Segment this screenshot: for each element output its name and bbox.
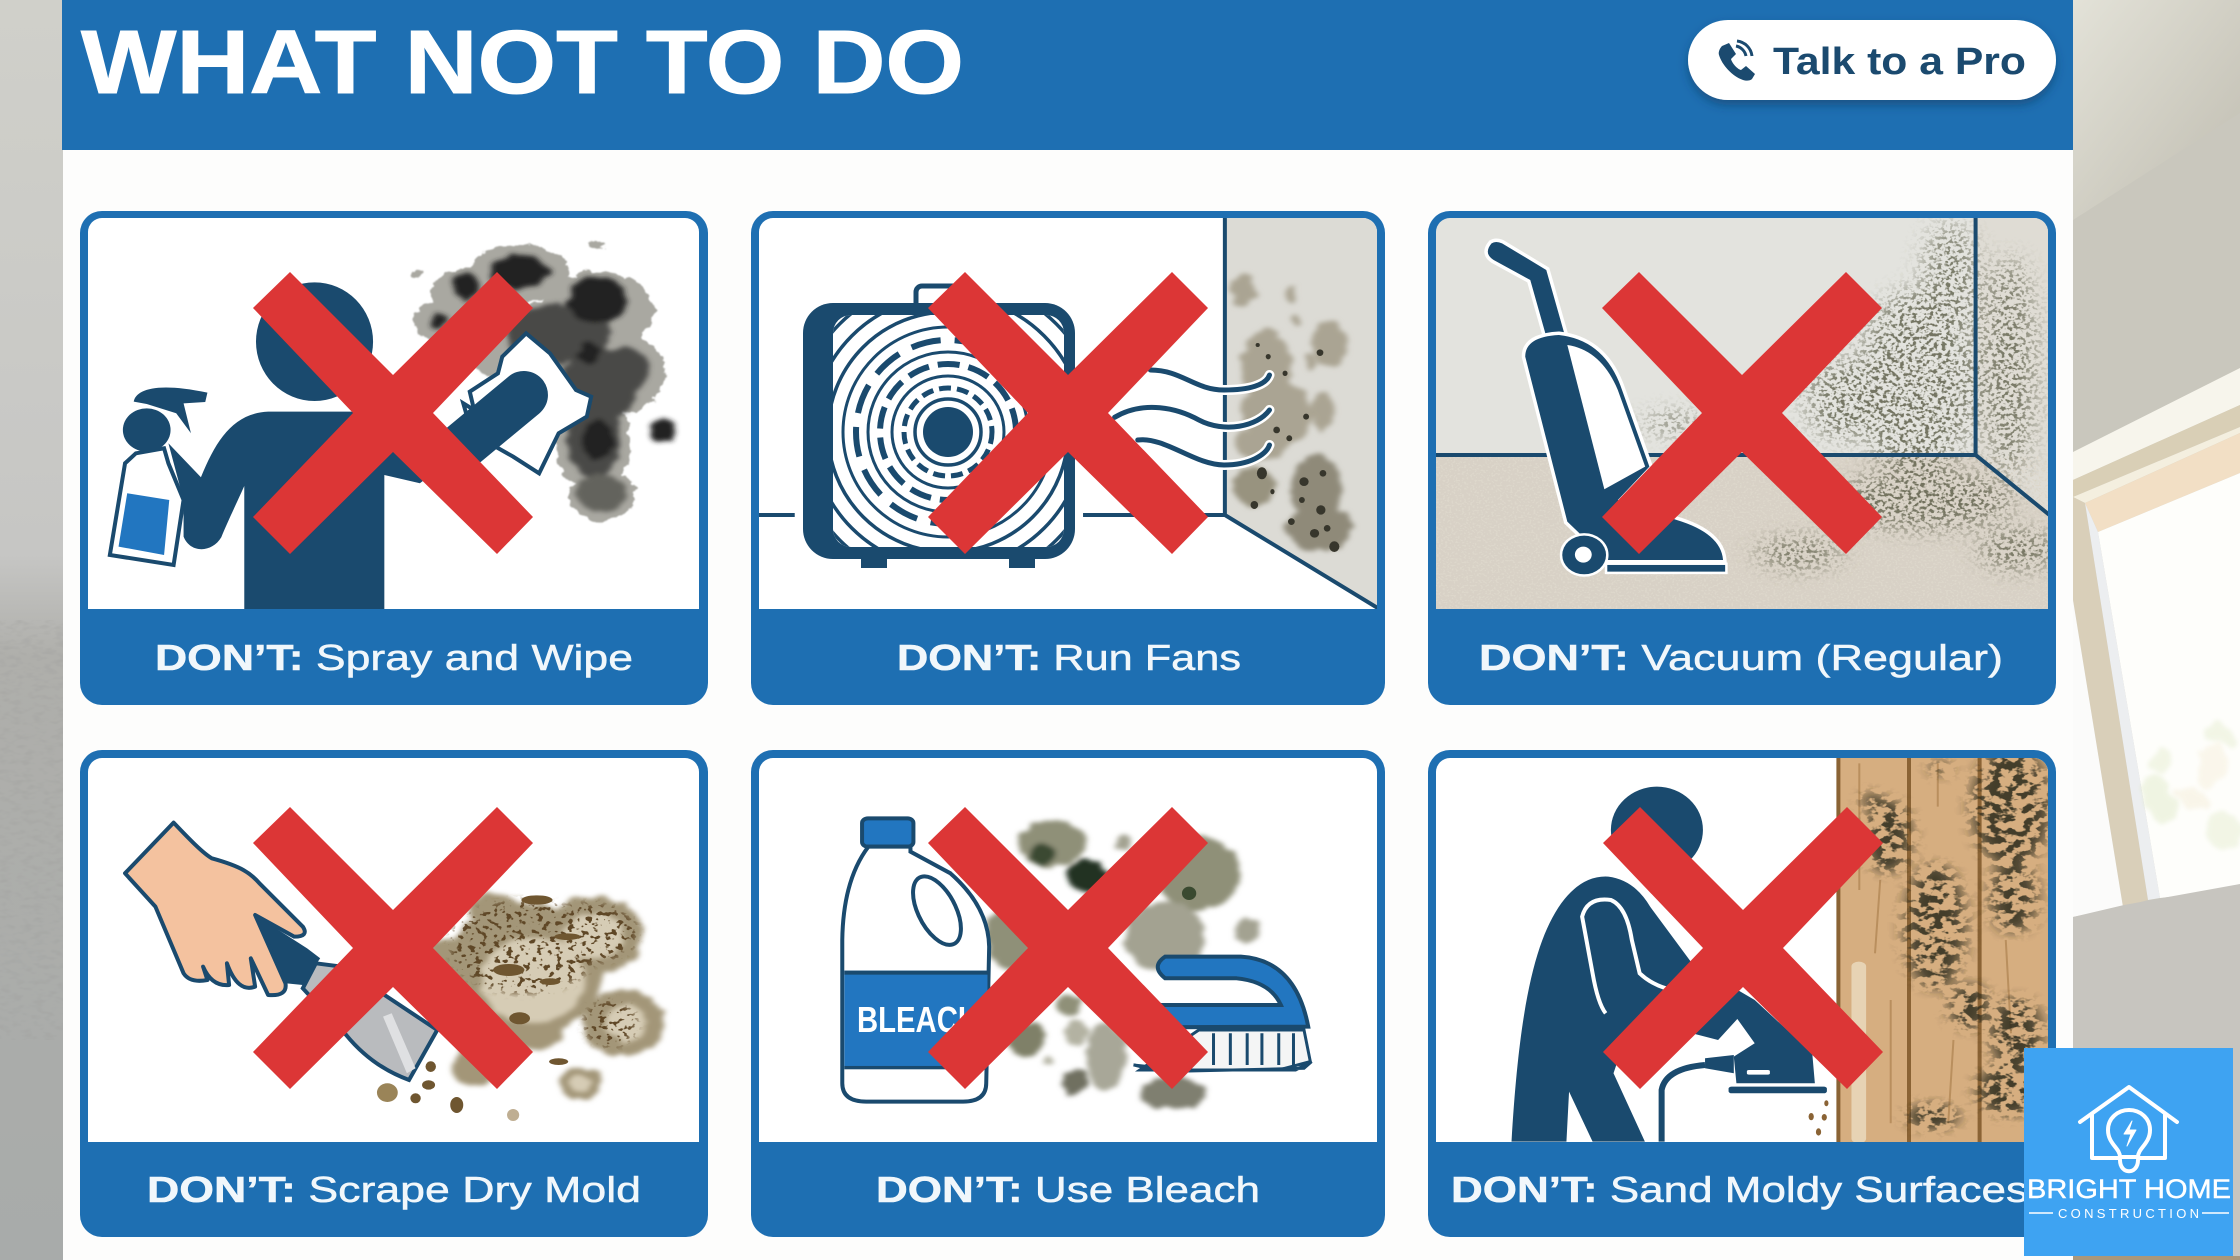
caption: DON’T: Spray and Wipe (155, 637, 633, 678)
airflow lines (1115, 370, 1269, 465)
caption: DON’T: Use Bleach (876, 1169, 1260, 1210)
icon: phone (1719, 41, 1755, 81)
spray bottle (110, 387, 207, 565)
button: talk to a pro (1688, 20, 2056, 100)
vacuum cleaner (1488, 242, 1725, 574)
person silhouette (168, 282, 423, 609)
box fan (803, 284, 1075, 568)
bottle label text: BLEACH (857, 999, 979, 1040)
mold patch (411, 240, 676, 522)
hand (125, 823, 305, 995)
scraper (255, 915, 437, 1080)
caption: DON’T: Sand Moldy Surfaces (1451, 1169, 2028, 1210)
header bar (62, 0, 2073, 150)
panel: scrape dry mold (80, 750, 708, 1237)
mold on planks (1863, 747, 2050, 1130)
logo tagline: CONSTRUCTION (2058, 1206, 2199, 1221)
dry mold (426, 893, 664, 1099)
person silhouette (1512, 787, 1827, 1142)
illustration: hand scraping mold (125, 823, 664, 1121)
brush (1134, 957, 1312, 1072)
illustration: person sanding moldy wood (1512, 747, 2056, 1143)
red cross (928, 272, 1208, 554)
button label: Talk to a Pro (1773, 41, 2026, 83)
logo badge (2024, 1048, 2233, 1256)
room (1978, 218, 2048, 511)
red cross (1602, 272, 1882, 554)
panel: sand moldy surfaces (1428, 747, 2056, 1237)
cloth (463, 333, 591, 473)
background: left wall (0, 0, 63, 1260)
caption: DON’T: Scrape Dry Mold (147, 1169, 641, 1210)
mold flakes (377, 895, 580, 1121)
wall and floor lines (759, 217, 1380, 609)
logo name: BRIGHT HOME (2027, 1174, 2231, 1204)
panel: vacuum regular (1428, 211, 2056, 705)
icon: house with light bulb (2080, 1087, 2177, 1171)
red cross (253, 272, 533, 554)
panel: spray and wipe (80, 211, 708, 705)
illustration: vacuum in a moldy room (1433, 213, 2056, 613)
red cross (1603, 807, 1883, 1089)
mold spots (986, 820, 1259, 1109)
panel: use bleach (751, 750, 1385, 1237)
red cross (928, 807, 1208, 1089)
moldy wall (1224, 217, 1380, 609)
red cross (253, 807, 533, 1089)
sanding dust (1809, 1100, 1828, 1136)
caption: DON’T: Run Fans (897, 637, 1241, 678)
illustration: fan blowing at moldy wall (759, 217, 1380, 609)
mold on walls and floor (1643, 223, 2056, 570)
background: room with window on the right (2073, 0, 2240, 1260)
wood planks (1837, 753, 2056, 1143)
illustration: person spraying and wiping mold (110, 240, 676, 609)
room edges (1436, 213, 2056, 520)
title: WHAT NOT TO DO (81, 13, 964, 113)
panel: run fans (751, 211, 1385, 705)
bottle (842, 818, 989, 1102)
caption: DON’T: Vacuum (Regular) (1479, 637, 2003, 678)
illustration: bleach bottle and brush (842, 818, 1312, 1109)
